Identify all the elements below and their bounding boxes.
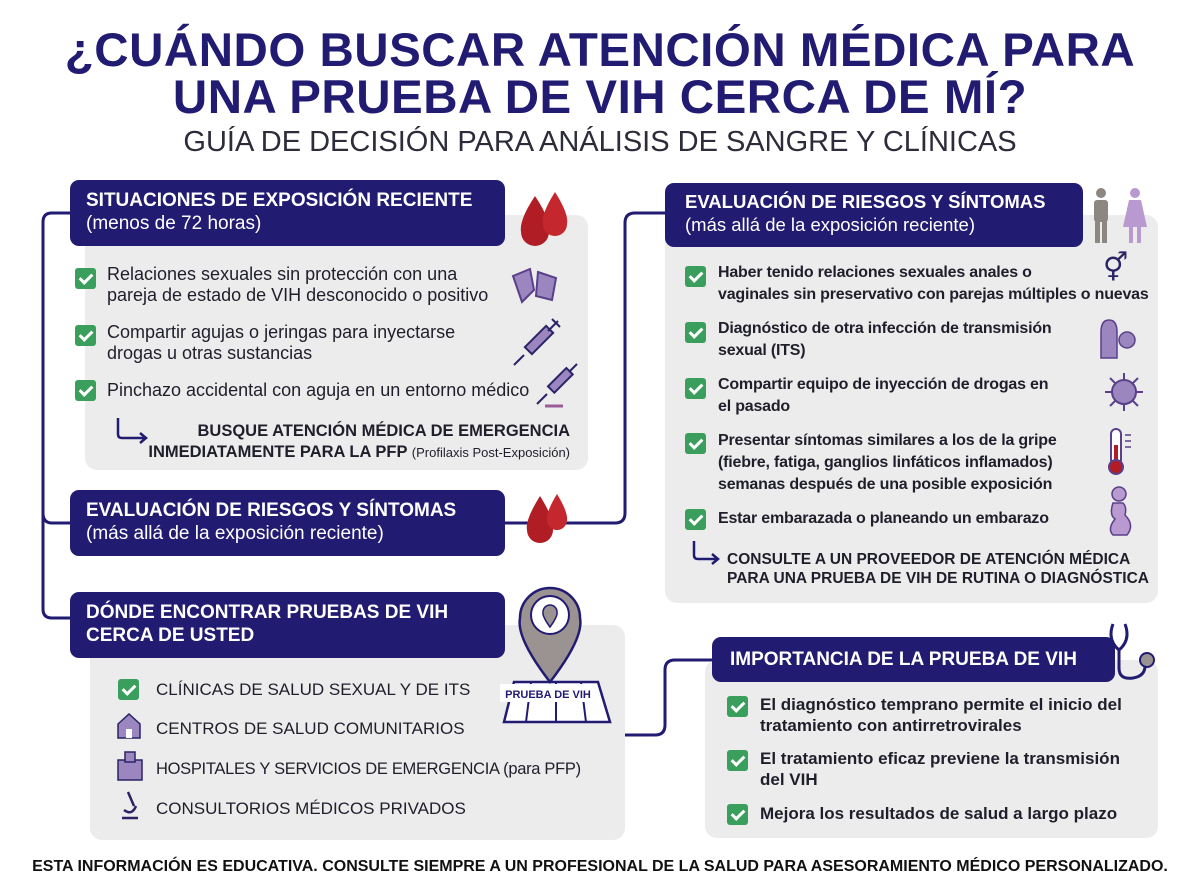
arrow 2 (692, 541, 720, 565)
icon: syringe (513, 318, 561, 366)
header: risk right (665, 183, 1083, 247)
icon: condom 2 (1100, 319, 1136, 359)
callout: emergency (148, 421, 570, 461)
panel: risk evaluation right: (fiebre, fatiga, ganglios linfáticos inflamados) (718, 454, 1052, 471)
header: recent exposure: (menos de 72 horas) (86, 213, 261, 234)
header: risk evaluation left: (más allá de la exposición reciente) (86, 523, 384, 544)
panel: where to find: CENTROS DE SALUD COMUNITARIOS (156, 719, 465, 738)
title (65, 24, 1135, 124)
header: risk right: EVALUACIÓN DE RIESGOS Y SÍNTOMAS (685, 191, 1045, 212)
title: UNA PRUEBA DE VIH CERCA DE MÍ? (173, 71, 1027, 124)
icon: thermometer (1108, 428, 1131, 475)
header: importance (712, 637, 1115, 682)
panel: importance (705, 624, 1158, 838)
header: risk evaluation left (70, 490, 505, 556)
panel: risk evaluation right: Haber tenido relaciones sexuales anales o (718, 264, 1032, 281)
icon: hospital (117, 751, 143, 781)
panel: where to find (70, 592, 625, 840)
icon: microscope (122, 792, 138, 820)
header: recent exposure (70, 180, 505, 246)
header: where: DÓNDE ENCONTRAR PRUEBAS DE VIH (86, 602, 448, 623)
callout: emergency: INMEDIATAMENTE PARA LA PFP (Profilaxis Post-Exposición) (148, 443, 570, 461)
panel: risk evaluation right: Presentar síntomas similares a los de la gripe (718, 432, 1057, 449)
icon: map pin (500, 586, 612, 724)
icon: blood drops (520, 192, 568, 246)
panel: importance: El diagnóstico temprano permite el inicio del (760, 695, 1122, 714)
panel: recent exposure (70, 180, 588, 470)
header: risk evaluation left: EVALUACIÓN DE RIESGOS Y SÍNTOMAS (86, 500, 456, 521)
panel: recent exposure: drogas u otras sustancias (107, 343, 312, 363)
icon: stethoscope (1110, 624, 1155, 680)
icon: house (117, 713, 141, 739)
panel: risk evaluation right: Compartir equipo de inyección de drogas en (718, 376, 1048, 393)
icon: condom (512, 268, 558, 304)
panel: risk evaluation right: Diagnóstico de otra infección de transmisión (718, 320, 1051, 337)
header: risk right: (más allá de la exposición reciente) (685, 214, 975, 235)
header: recent exposure: SITUACIONES DE EXPOSICIÓN RECIENTE (86, 190, 472, 211)
panel: risk evaluation right: Estar embarazada o planeando un embarazo (718, 510, 1049, 527)
callout: emergency: BUSQUE ATENCIÓN MÉDICA DE EMERGENCIA (198, 422, 570, 440)
panel: where to find: CLÍNICAS DE SALUD SEXUAL Y DE ITS (156, 680, 470, 699)
icon: blood drops 2 (526, 494, 568, 543)
title: ¿CUÁNDO BUSCAR ATENCIÓN MÉDICA PARA (65, 24, 1135, 77)
panel: where to find: CONSULTORIOS MÉDICOS PRIVADOS (156, 799, 466, 818)
icon: gender: ⚥ (1103, 252, 1128, 283)
icon: people (1094, 188, 1147, 243)
icon: virus (1105, 373, 1143, 411)
panel: risk evaluation right: semanas después de una posible exposición (718, 476, 1052, 493)
panel: importance: tratamiento con antirretrovirales (760, 716, 1022, 735)
header: importance: IMPORTANCIA DE LA PRUEBA DE VIH (730, 649, 1077, 670)
panel: risk evaluation right: sexual (ITS) (718, 342, 805, 359)
icon: syringe 2 (536, 363, 578, 408)
panel: risk evaluation right: el pasado (718, 398, 790, 415)
panel: where to find: HOSPITALES Y SERVICIOS DE EMERGENCIA (para PFP) (156, 760, 581, 778)
panel: importance: del VIH (760, 770, 818, 789)
panel: recent exposure: Compartir agujas o jeringas para inyectarse (107, 322, 455, 342)
callout: consult: CONSULTE A UN PROVEEDOR DE ATENCIÓN MÉDICA (727, 551, 1130, 568)
subtitle: GUÍA DE DECISIÓN PARA ANÁLISIS DE SANGRE Y CLÍNICAS (183, 126, 1017, 158)
panel: recent exposure: pareja de estado de VIH desconocido o positivo (107, 285, 488, 305)
panel: recent exposure: Pinchazo accidental con aguja en un entorno médico (107, 380, 529, 400)
header: where: CERCA DE USTED (86, 625, 254, 646)
icon: pregnant (1110, 486, 1132, 536)
panel: recent exposure: Relaciones sexuales sin protección con una (107, 264, 457, 284)
callout: consult: PARA UNA PRUEBA DE VIH DE RUTINA O DIAGNÓSTICA (727, 570, 1149, 587)
panel: importance: El tratamiento eficaz previene la transmisión (760, 749, 1120, 768)
footer disclaimer: ESTA INFORMACIÓN ES EDUCATIVA. CONSULTE SIEMPRE A UN PROFESIONAL DE LA SALUD PARA ASESORAMIENTO MÉDICO PERSONALIZADO. (32, 858, 1168, 875)
arrow (116, 418, 148, 444)
panel: risk evaluation right (665, 183, 1158, 603)
header: where (70, 592, 505, 658)
panel: importance: Mejora los resultados de salud a largo plazo (760, 804, 1117, 823)
panel: risk evaluation right: vaginales sin preservativo con parejas múltiples o nuevas (718, 286, 1149, 303)
icon: map pin: PRUEBA DE VIH (505, 689, 591, 701)
callout: consult (727, 550, 1149, 587)
